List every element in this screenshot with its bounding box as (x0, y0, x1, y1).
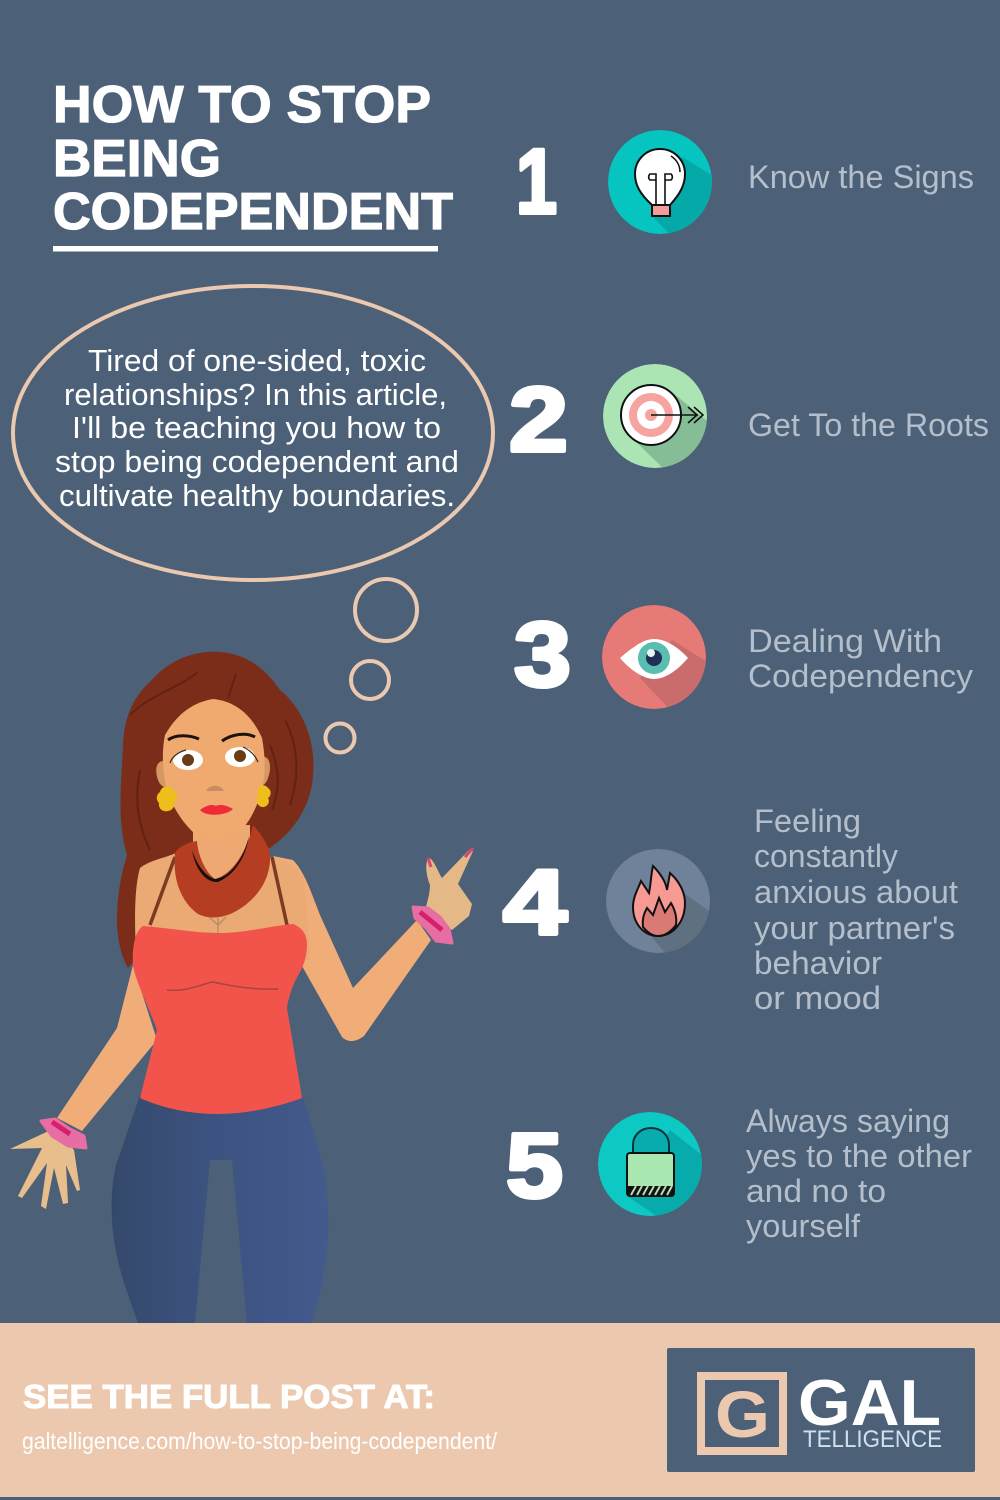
earrings (157, 785, 271, 811)
step 4 label: or mood (754, 980, 881, 1016)
logo: TELLIGENCE (803, 1426, 942, 1453)
title: BEING (53, 130, 221, 188)
necklace (209, 917, 226, 933)
step 5 label (746, 1103, 972, 1244)
step 4 label: behavior (754, 945, 882, 981)
step 5 label: and no to (746, 1173, 886, 1209)
right scrunchie (413, 907, 452, 943)
step 4 label: constantly (754, 838, 898, 874)
hair strand shading (130, 672, 296, 850)
chest and shoulders (135, 853, 310, 960)
eyes (173, 750, 203, 770)
scarf (175, 825, 270, 917)
step 5 number: 5 (506, 1115, 563, 1217)
step 2 number: 2 (509, 369, 568, 471)
step 3 label: Dealing With (748, 623, 942, 659)
step 3 label: Codependency (748, 658, 973, 694)
thought bubble trail circles (326, 579, 417, 752)
step 2 label: Get To the Roots (748, 407, 989, 443)
ears (156, 757, 270, 788)
step 1 label: Know the Signs (748, 159, 974, 195)
red top (133, 924, 307, 1114)
thought bubble: I'll be teaching you how to (72, 410, 441, 445)
eyelashes (170, 747, 258, 763)
icon: flame (606, 849, 710, 953)
thought bubble: relationships? In this article, (64, 377, 447, 412)
scrunchie accents (52, 912, 442, 1134)
jeans (112, 1095, 328, 1323)
step 4 label: Feeling (754, 803, 861, 839)
lips (200, 805, 233, 815)
thought bubble: Tired of one-sided, toxic (88, 343, 426, 378)
step 3 label (748, 623, 973, 694)
title: HOW TO STOP (53, 76, 431, 134)
right arm (273, 856, 431, 1041)
bust line (167, 982, 278, 990)
step 5 label: Always saying (746, 1103, 950, 1139)
title (53, 76, 453, 252)
eyebrows (168, 734, 255, 741)
nose (206, 786, 224, 791)
icon: target (603, 364, 707, 468)
title: CODEPENDENT (53, 183, 453, 241)
step 4 label: your partner's (754, 910, 955, 946)
icon: eye (602, 605, 706, 709)
neck (193, 825, 250, 885)
illustration: woman pointing (10, 652, 473, 1323)
logo: G (715, 1377, 770, 1451)
thought bubble: cultivate healthy boundaries. (59, 478, 455, 513)
top straps (150, 857, 287, 925)
step 5 label: yourself (746, 1208, 860, 1244)
icon: padlock (598, 1112, 702, 1216)
footer band (0, 1323, 1000, 1497)
footer url: galtelligence.com/how-to-stop-being-codependent/ (22, 1428, 498, 1454)
right hand (424, 850, 473, 930)
face (163, 699, 265, 839)
step 4 number: 4 (503, 852, 567, 954)
step 3 number: 3 (514, 604, 571, 706)
step 4 label: anxious about (754, 874, 958, 910)
thought bubble: stop being codependent and (55, 444, 459, 479)
left hand (10, 1128, 80, 1209)
step 4 label (754, 803, 958, 1016)
logo: GAL (798, 1366, 941, 1439)
scarf shadow (192, 836, 249, 882)
right nails (428, 848, 473, 867)
footer call to action: SEE THE FULL POST AT: (23, 1378, 435, 1415)
left arm (57, 965, 157, 1131)
hair (117, 652, 313, 968)
step 5 label: yes to the other (746, 1138, 972, 1174)
left scrunchie (41, 1119, 86, 1148)
step 1 number: 1 (516, 131, 557, 233)
thought bubble (13, 286, 493, 580)
icon: light bulb (608, 130, 712, 234)
logo (667, 1348, 975, 1472)
